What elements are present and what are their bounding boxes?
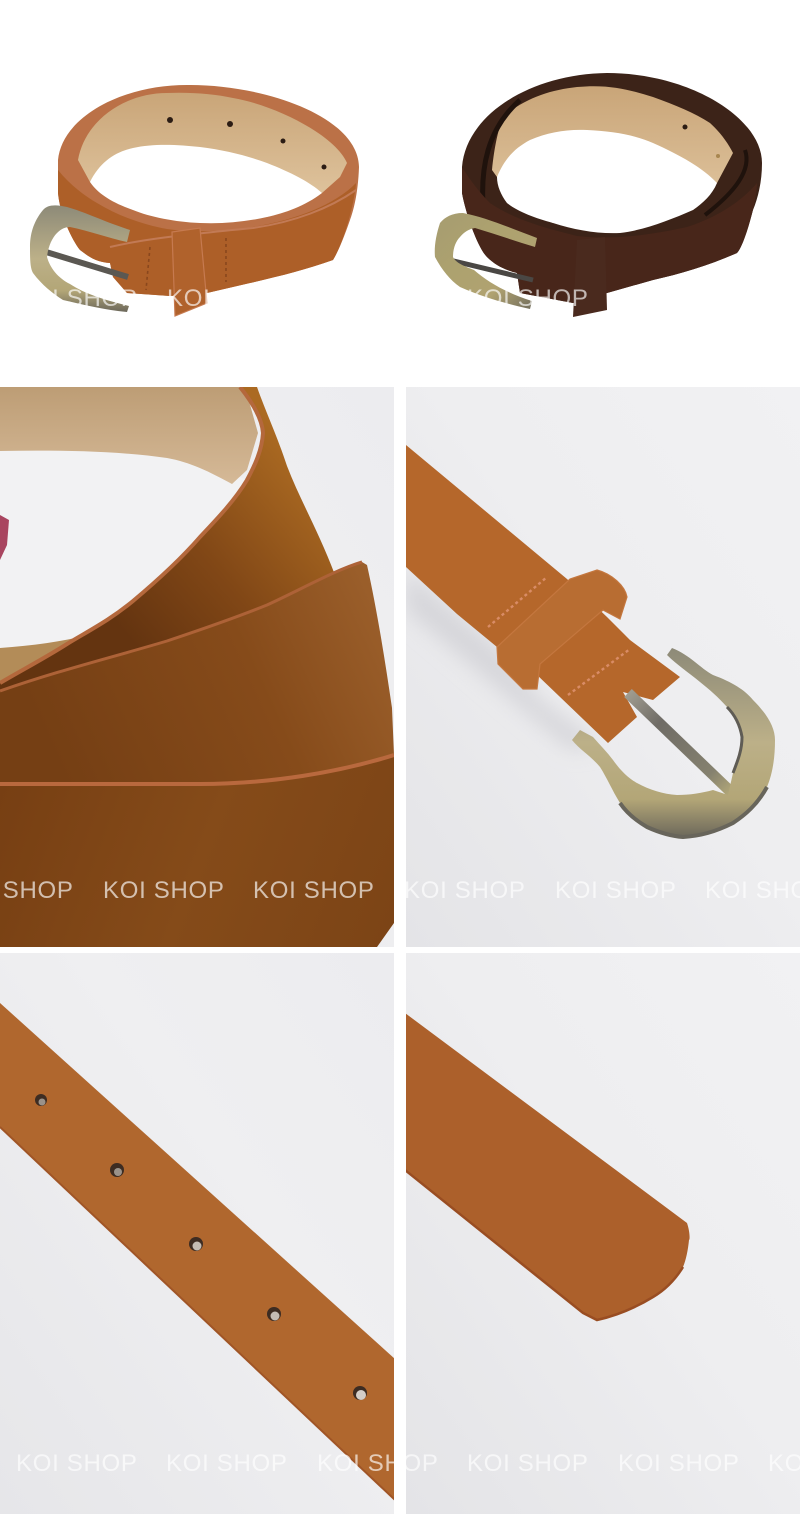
watermark row: middle: KOI SHOP xyxy=(404,877,526,904)
belt keeper loop xyxy=(573,237,607,317)
belt keeper loop xyxy=(497,570,627,689)
panel: close-up of coiled suede xyxy=(0,387,394,947)
belt centre hole xyxy=(90,145,322,223)
icon: buckle xyxy=(435,213,537,309)
watermark row: top: KOI SHOP xyxy=(467,285,589,312)
icon: belt holes xyxy=(35,1094,367,1400)
tan lining xyxy=(492,86,733,223)
tan lining xyxy=(78,93,347,217)
panel: belt holes close-up xyxy=(0,953,395,1514)
suede front band xyxy=(462,167,757,303)
pink item at edge xyxy=(0,515,9,560)
bottom layer xyxy=(0,755,394,947)
stitching xyxy=(488,577,630,695)
belt band xyxy=(406,445,680,743)
stitching xyxy=(146,238,226,290)
watermark row: middle: KOI SHOP xyxy=(103,877,225,904)
watermark row: top: KOI SHOP xyxy=(16,285,138,312)
panel: tan belt coiled xyxy=(30,85,359,316)
watermark row: bottom: KOI SHOP xyxy=(467,1450,589,1477)
soft shadow under belt xyxy=(406,579,586,750)
watermark row: bottom: KOI SHOP xyxy=(618,1450,740,1477)
icon: belt holes xyxy=(682,124,720,158)
watermark row: bottom: KOI SHOP xyxy=(166,1450,288,1477)
watermark row: top xyxy=(16,285,740,312)
white centre of coil xyxy=(0,450,247,690)
watermark row: bottom: KOI SHOP xyxy=(16,1450,138,1477)
icon: belt holes xyxy=(167,117,326,170)
belt keeper loop xyxy=(172,228,207,316)
watermark row: bottom xyxy=(16,1450,800,1477)
watermark row: top: KOI SHOP xyxy=(618,285,740,312)
belt centre hole xyxy=(497,130,717,233)
icon: buckle xyxy=(30,205,130,312)
panel: buckle close-up xyxy=(406,387,800,947)
watermark row: top: KOI SHOP xyxy=(167,285,289,312)
icon: buckle xyxy=(572,648,775,837)
watermark row: middle: KOI SHOP xyxy=(253,877,375,904)
top layer xyxy=(0,387,334,690)
suede front band xyxy=(58,170,356,296)
middle layer xyxy=(0,562,394,783)
inner tan lining xyxy=(0,387,258,484)
watermark row: bottom: KOI SHOP xyxy=(317,1450,439,1477)
watermark row: middle: KOI SHOP xyxy=(555,877,677,904)
panel: dark brown belt coiled xyxy=(435,73,762,317)
watermark row: middle xyxy=(0,877,800,904)
panel: belt tip close-up xyxy=(405,953,800,1514)
